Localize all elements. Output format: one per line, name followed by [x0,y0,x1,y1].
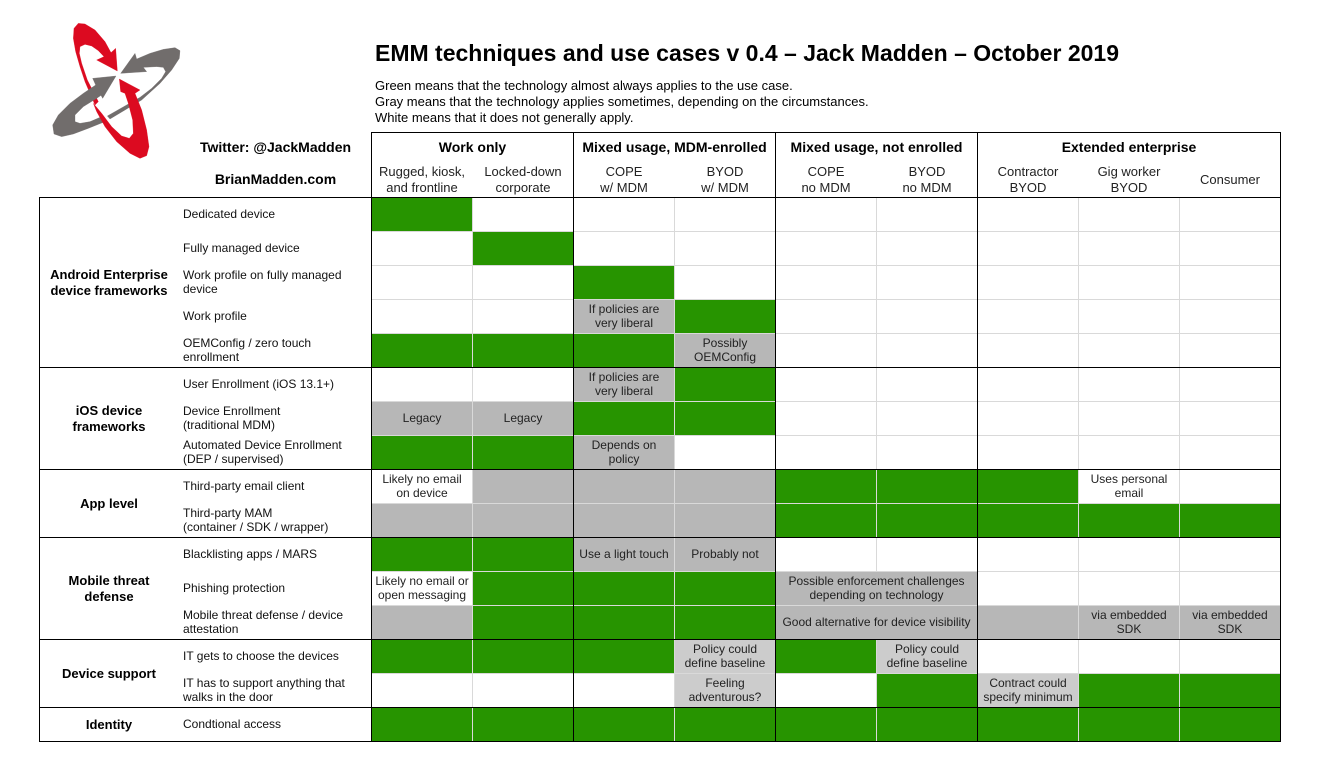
row: device enrollment: Legacy [504,411,542,425]
row: IT chooses devices [372,639,978,673]
row: work profile: If policies are [589,302,660,316]
row: OEMConfig: Possibly [703,336,747,350]
row: IT chooses devices: define baseline [887,656,968,670]
row: phishing protection: Likely no email or [375,574,469,588]
use case column headings: BYOD [909,164,945,179]
column group headings: Extended enterprise [1062,139,1197,155]
row: user enrollment: If policies are [589,370,660,384]
technique row labels: Blacklisting apps / MARS [183,547,317,561]
technique row labels: (DEP / supervised) [183,452,283,466]
row: third-party email client: on device [396,486,448,500]
technique category labels: frameworks [73,419,145,434]
column group headings [439,139,1197,155]
row: IT supports anything: Feeling [705,676,745,690]
technique row labels: Automated Device Enrollment [183,438,342,452]
use case column headings: BYOD [1111,180,1147,195]
column group headings: Mixed usage, not enrolled [791,139,962,155]
row: conditional access [372,707,1281,741]
technique row labels: IT has to support anything that [183,676,346,690]
technique row labels: User Enrollment (iOS 13.1+) [183,377,334,391]
author credits: Twitter: @JackMadden [200,139,351,155]
legend text: White means that it does not generally apply. [375,110,633,125]
row: mobile threat defense: SDK [1218,622,1242,636]
technique category labels: defense [84,589,134,604]
row: phishing protection [375,571,978,605]
technique category labels: Mobile threat [69,573,150,588]
technique row labels: Dedicated device [183,207,275,221]
technique row labels [182,207,346,731]
row: phishing protection: Possible enforcement challenges [788,574,965,588]
use case column headings: no MDM [801,180,851,195]
use case column headings: no MDM [902,180,952,195]
technique row labels: OEMConfig / zero touch [183,336,311,350]
technique row labels: Third-party MAM [183,506,272,520]
row: third-party MAM [372,503,1281,537]
technique category labels: App level [80,496,138,511]
technique row labels: Mobile threat defense / device [183,608,343,622]
author credits: BrianMadden.com [215,171,336,187]
row: device enrollment [372,401,776,435]
row: dedicated device [372,197,473,231]
row: OEMConfig [372,333,776,367]
legend text: Green means that the technology almost always applies to the use case. [375,78,793,93]
technique row labels: (container / SDK / wrapper) [183,520,328,534]
use case column headings: and frontline [386,180,458,195]
technique category labels: Identity [86,717,133,732]
technique row labels: IT gets to choose the devices [183,649,339,663]
row: phishing protection: open messaging [378,588,466,602]
row: third-party email client [382,469,1167,503]
row: IT chooses devices: Policy could [895,642,959,656]
technique row labels: device [183,282,218,296]
row: fully managed device [473,231,574,265]
row: device enrollment: Legacy [403,411,441,425]
technique row labels: Condtional access [183,717,281,731]
row: phishing protection: depending on technology [809,588,944,602]
technique row labels: Device Enrollment [183,404,281,418]
use case column headings: Contractor [998,164,1059,179]
row: mobile threat defense: SDK [1117,622,1141,636]
row: mobile threat defense: via embedded [1091,608,1167,622]
row: work profile: very liberal [595,316,653,330]
legend text: Gray means that the technology applies sometimes, depending on the circumstances. [375,94,869,109]
row: mobile threat defense: Good alternative for device visibility [782,615,971,629]
use case column headings: w/ MDM [599,180,648,195]
row: IT chooses devices: Policy could [693,642,757,656]
row: blacklisting apps [372,537,776,571]
use case column headings: Consumer [1200,172,1261,187]
legend text [375,78,869,125]
technique category labels [50,267,168,732]
column group headings: Work only [439,139,506,155]
column group headings: Mixed usage, MDM-enrolled [582,139,767,155]
row: IT supports anything: Contract could [989,676,1067,690]
row: work profile on fully managed device [574,265,675,299]
use case column headings: BYOD [707,164,743,179]
applicability matrix [372,197,1281,741]
row: IT supports anything: specify minimum [983,690,1073,704]
row: work profile [574,299,776,333]
row: third-party email client: email [1115,486,1143,500]
row: IT chooses devices: define baseline [685,656,766,670]
row: blacklisting apps: Probably not [691,547,759,561]
row: IT supports anything [675,673,1281,707]
row: OEMConfig: OEMConfig [694,350,756,364]
row: automated device enrollment: Depends on [592,438,656,452]
technique category labels: iOS device [76,403,142,418]
use case column headings: w/ MDM [700,180,749,195]
row: user enrollment [574,367,776,401]
technique row labels: Third-party email client [183,479,305,493]
row: mobile threat defense [372,605,1281,639]
row: third-party email client: Likely no email [382,472,462,486]
technique row labels: (traditional MDM) [183,418,275,432]
use case column headings: Rugged, kiosk, [379,164,465,179]
row: third-party email client: Uses personal [1091,472,1167,486]
use case column headings: Gig worker [1098,164,1161,179]
technique row labels: Work profile [183,309,247,323]
use case column headings: COPE [808,164,845,179]
row: user enrollment: very liberal [595,384,653,398]
technique row labels: attestation [183,622,238,636]
use case column headings: Locked-down [484,164,562,179]
technique row labels: Work profile on fully managed [183,268,342,282]
author credits [200,139,351,187]
row: IT supports anything: adventurous? [689,690,762,704]
technique row labels: enrollment [183,350,240,364]
title: EMM techniques and use cases v 0.4 – Jack Madden – October 2019 [375,40,1119,66]
technique category labels: device frameworks [50,283,168,298]
technique category labels: Android Enterprise [50,267,168,282]
use case column headings [379,164,1261,195]
use case column headings: COPE [606,164,643,179]
row: blacklisting apps: Use a light touch [579,547,669,561]
icon: red and gray arrows logo [53,23,180,158]
use case column headings: BYOD [1010,180,1046,195]
row: mobile threat defense: via embedded [1192,608,1268,622]
technique category labels: Device support [62,666,157,681]
use case column headings: corporate [496,180,550,195]
row: automated device enrollment: policy [609,452,639,466]
row: automated device enrollment [372,435,675,469]
technique row labels: walks in the door [182,690,273,704]
technique row labels: Fully managed device [183,241,300,255]
technique row labels: Phishing protection [183,581,285,595]
